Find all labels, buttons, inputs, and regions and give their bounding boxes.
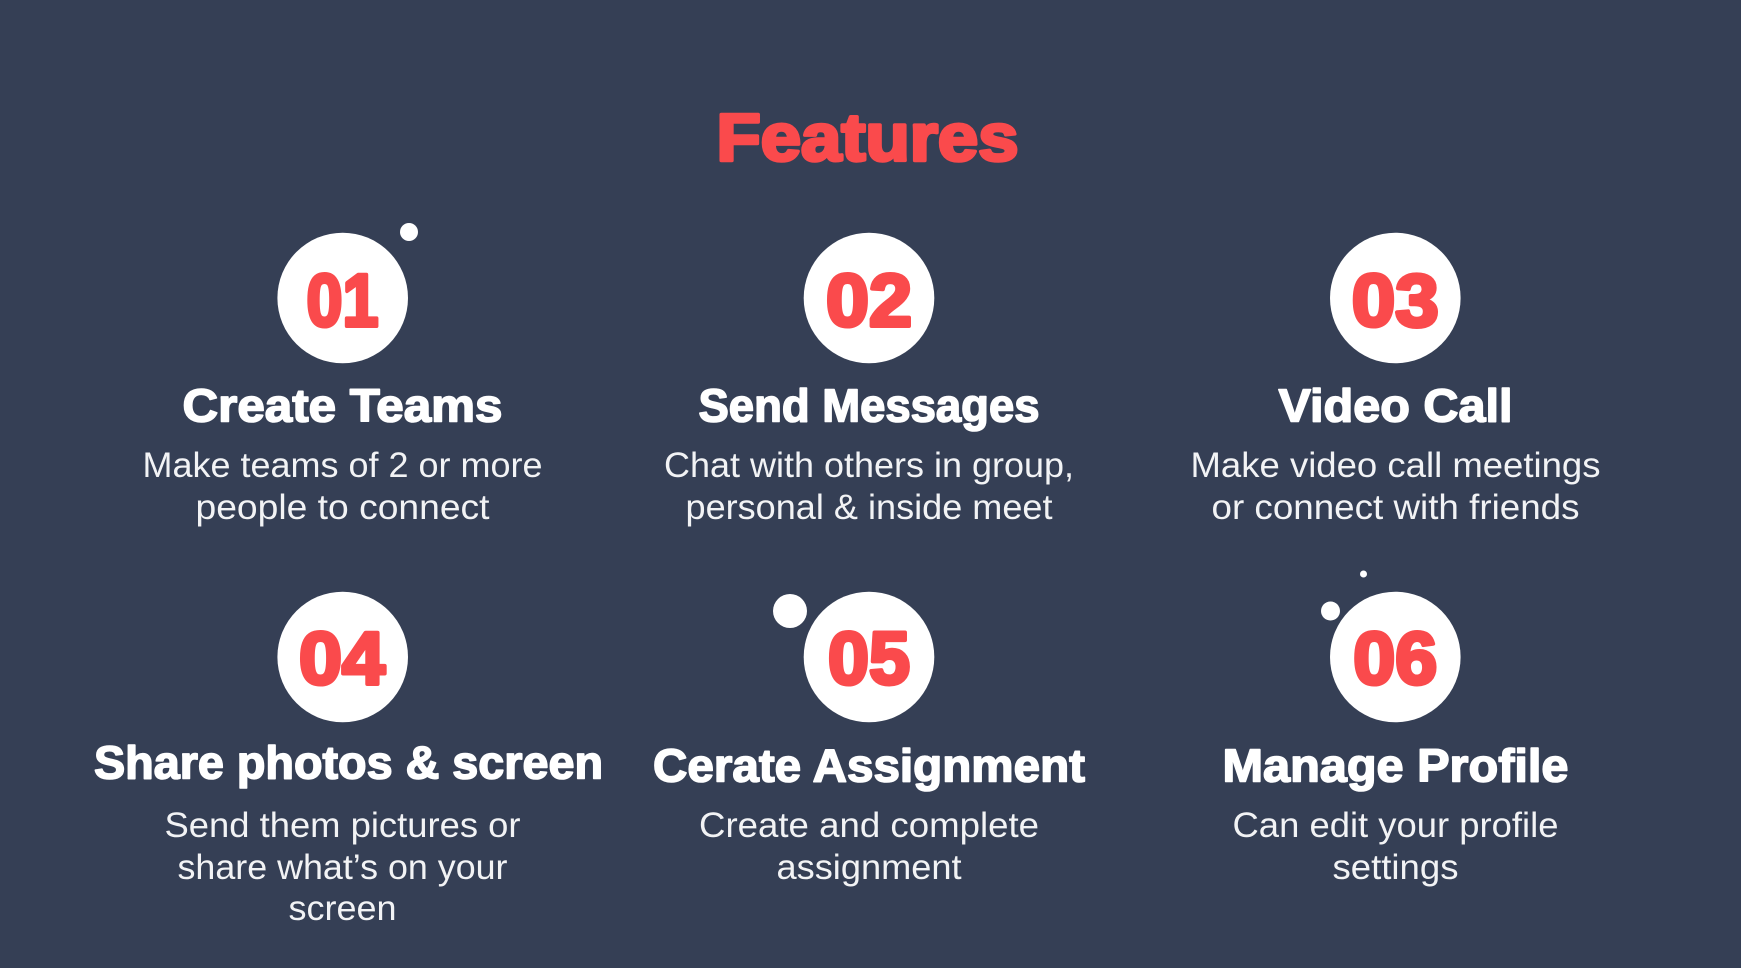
description: share what’s on your (178, 848, 508, 887)
description (1232, 806, 1558, 887)
title: Features (716, 100, 1018, 176)
panel: create assignment (653, 592, 1085, 887)
description (664, 446, 1074, 527)
number badge 04: 04 (299, 617, 385, 700)
description: Can edit your profile (1232, 806, 1558, 845)
heading: Create Teams (182, 380, 502, 432)
heading: Manage Profile (1222, 740, 1568, 792)
description (699, 806, 1039, 887)
panel: create teams (142, 223, 542, 527)
panel: manage profile (1222, 570, 1568, 887)
number badge 05 (804, 592, 934, 722)
number badge 01: 01 (306, 259, 378, 342)
panel: share photos and screen (94, 592, 603, 928)
number badge 04 (277, 592, 408, 722)
decorative dot (773, 594, 807, 628)
panel: video call (1190, 233, 1600, 527)
number badge 03 (1330, 233, 1461, 363)
description (1190, 446, 1600, 527)
description: settings (1332, 848, 1458, 887)
heading: Cerate Assignment (653, 740, 1085, 792)
description: Make video call meetings (1190, 446, 1600, 485)
description: screen (288, 889, 396, 928)
decorative dot (400, 223, 418, 241)
number badge 01 (277, 233, 408, 363)
description (142, 446, 542, 527)
number badge 02 (804, 233, 934, 363)
heading: Video Call (1278, 380, 1512, 432)
number badge 02: 02 (826, 259, 912, 342)
description: Chat with others in group, (664, 446, 1074, 485)
description: or connect with friends (1212, 488, 1580, 527)
description: Make teams of 2 or more (142, 446, 542, 485)
heading: Share photos & screen (94, 736, 603, 788)
description (164, 806, 521, 928)
number badge 06 (1330, 592, 1461, 722)
description: Create and complete (699, 806, 1039, 845)
panel: send messages (664, 233, 1074, 527)
description: personal & inside meet (686, 488, 1053, 527)
heading: Send Messages (698, 380, 1040, 432)
decorative dots (1321, 570, 1367, 620)
description: Send them pictures or (164, 806, 521, 845)
number badge 06: 06 (1353, 617, 1437, 700)
description: assignment (776, 848, 962, 887)
number badge 05: 05 (828, 617, 910, 700)
number badge 03: 03 (1352, 259, 1439, 342)
description: people to connect (196, 488, 490, 527)
